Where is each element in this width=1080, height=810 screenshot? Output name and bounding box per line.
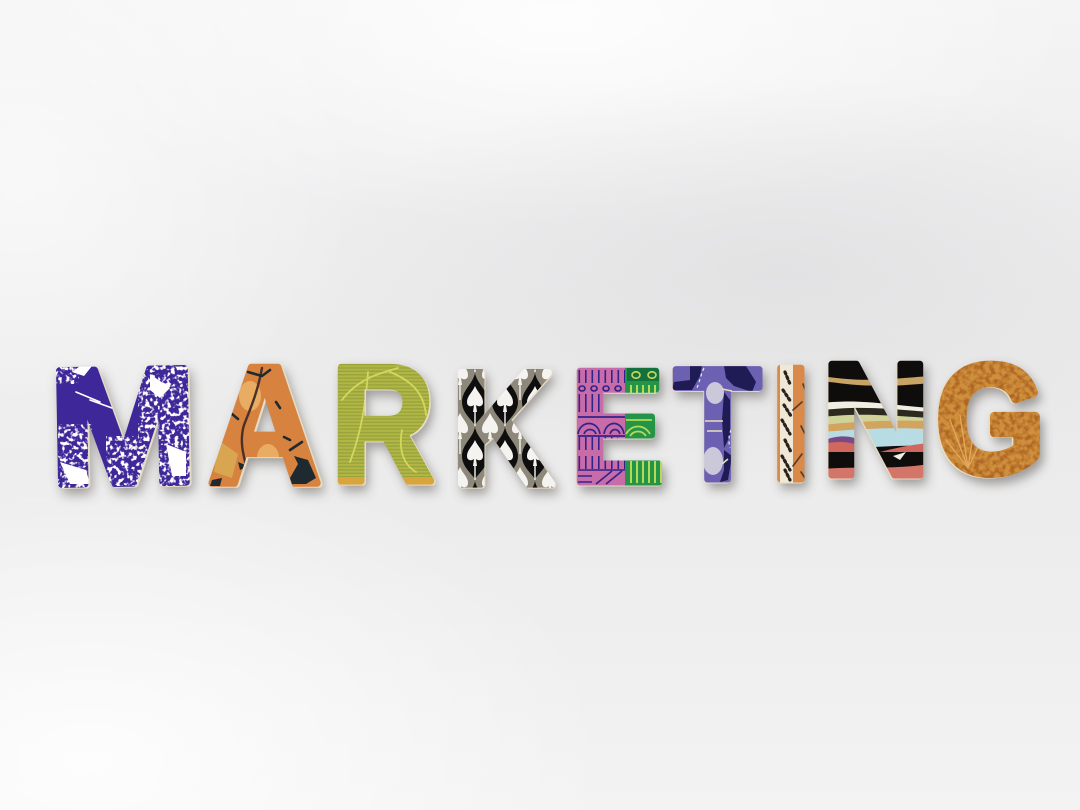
letter M: purple and white toile: M: [51, 340, 202, 527]
letter M: purple and white toile: M: [49, 335, 200, 521]
letter I: orange and cream strip print: I: [770, 335, 810, 515]
letter K: black and grey ogee print: K: [453, 340, 554, 520]
letter K: black and grey ogee print: K: [455, 345, 557, 525]
letter T: periwinkle and navy print: T: [678, 342, 765, 519]
letter N: wavy striped print: N: [821, 330, 929, 510]
letter T: periwinkle and navy print: T: [673, 337, 760, 514]
letter A: orange botanical print: A: [212, 338, 325, 525]
letter G: golden orange floral print: G: [935, 334, 1043, 505]
letter E: pink and green geometric print: E: [570, 338, 664, 518]
letter G: golden orange floral print: G: [940, 340, 1048, 511]
letter R: lime green print: R: [335, 338, 438, 522]
letter T: periwinkle and navy print: [670, 365, 772, 496]
letter R: lime green print: R: [333, 333, 436, 517]
letter A: orange botanical print: A: [210, 333, 323, 520]
letter A: orange botanical print: [207, 362, 330, 500]
letter E: pink and green geometric print: E: [574, 343, 668, 523]
letter I: orange and cream strip print: I: [774, 340, 814, 520]
letter N: wavy striped print: N: [825, 335, 933, 515]
